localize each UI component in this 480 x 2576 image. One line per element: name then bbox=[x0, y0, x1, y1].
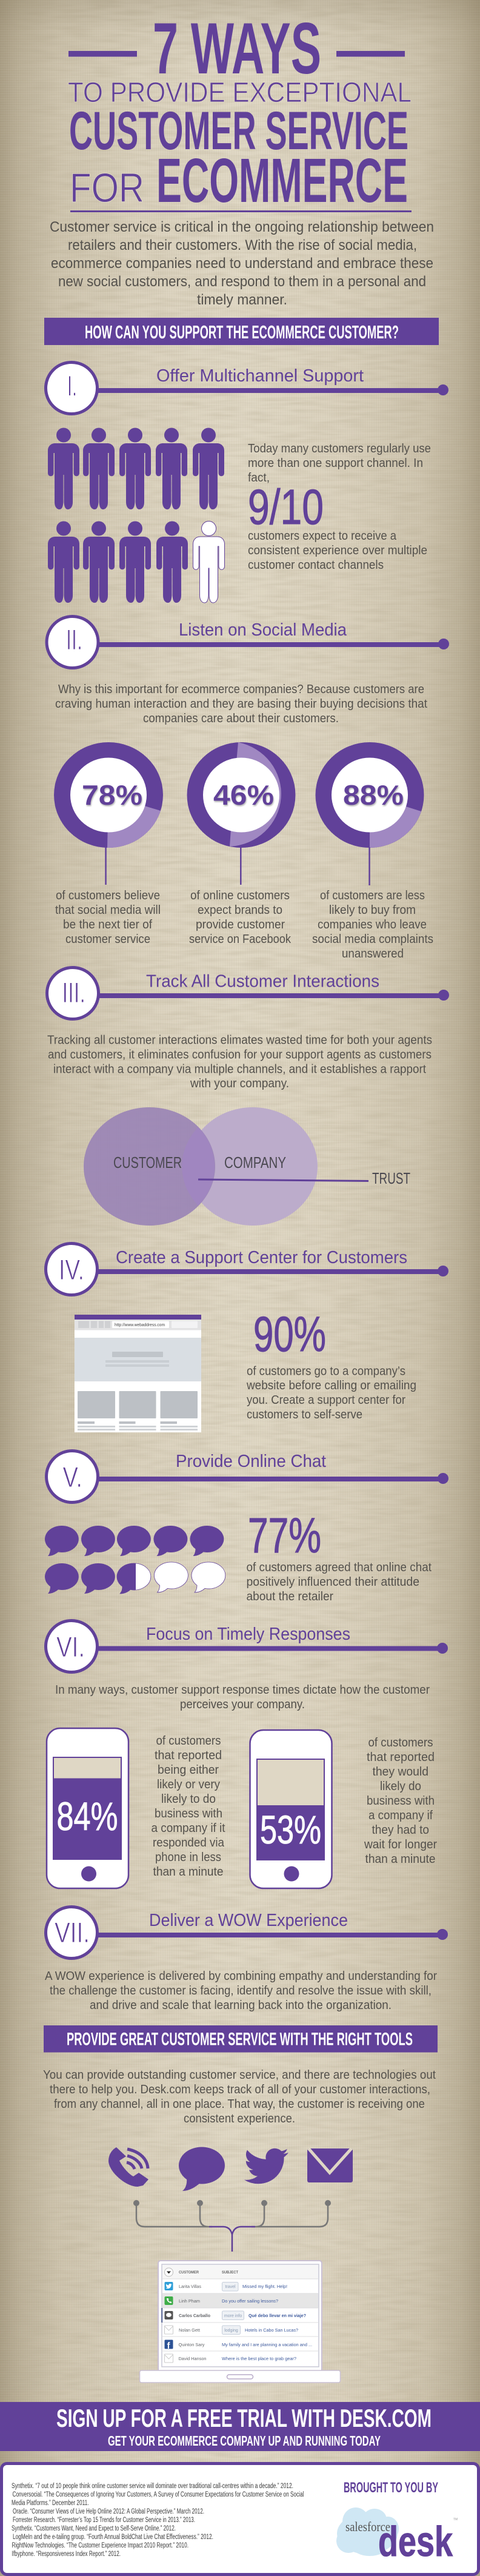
phone gauge: 53% bbox=[250, 1730, 332, 1888]
phone gauge: 84% bbox=[47, 1728, 128, 1888]
icon: envelope bbox=[307, 2148, 353, 2182]
captions under donuts: expect brands to bbox=[198, 904, 282, 917]
captions under donuts: that social media will bbox=[55, 904, 161, 917]
text: 84% caption: responded via bbox=[153, 1836, 225, 1850]
stat: 90% self-serve: you. Create a support center for bbox=[247, 1394, 405, 1407]
text: 53% caption: business with bbox=[367, 1794, 435, 1808]
sources list: LogMeIn and the e-tailing group. “Fourth Annual BoldChat Live Chat Effectiveness.” 2012. bbox=[13, 2534, 213, 2541]
laptop with desk.com case list: travel bbox=[225, 2285, 236, 2289]
banner: right tools bbox=[44, 2025, 438, 2052]
text: multichannel stat: consistent experience over multiple bbox=[248, 544, 427, 557]
stat: 90% self-serve: 90% bbox=[253, 1307, 326, 1362]
title: FOR bbox=[70, 165, 144, 211]
section I header bbox=[46, 363, 448, 414]
section VI header bbox=[46, 1620, 448, 1672]
donut chart: 46% bbox=[187, 742, 296, 885]
logo: salesforce desk: salesforce bbox=[345, 2519, 390, 2534]
text: why social matters: craving human interaction and they are basing their buying decisions that bbox=[55, 697, 427, 711]
banner: how can you support bbox=[44, 318, 439, 345]
donut chart: 88% bbox=[315, 742, 424, 885]
sources list: Synthetix. “Customers Want, Need and Expect to Self-Serve Online.” 2012. bbox=[12, 2525, 176, 2532]
laptop with desk.com case list: SUBJECT bbox=[222, 2271, 238, 2275]
text: 53% caption: that reported bbox=[367, 1751, 435, 1764]
stat: 90% self-serve: customers to self-serve bbox=[247, 1408, 362, 1421]
text: 53% caption: wait for longer bbox=[364, 1838, 437, 1851]
text: 53% caption bbox=[364, 1736, 437, 1866]
text: tracking interactions: with your company. bbox=[190, 1077, 289, 1090]
section III header: Track All Customer Interactions bbox=[146, 971, 379, 991]
text: multichannel stat: customer contact channels bbox=[248, 558, 384, 572]
stat: 90% self-serve bbox=[246, 1307, 416, 1421]
section V header bbox=[46, 1451, 448, 1503]
venn diagram: customer and company trust: TRUST bbox=[372, 1169, 410, 1187]
stat: 77% online chat bbox=[246, 1508, 432, 1603]
icon grid: nine of ten people bbox=[48, 428, 224, 603]
text: 84% caption: a company if it bbox=[152, 1822, 225, 1835]
section IV header: Create a Support Center for Customers bbox=[116, 1248, 407, 1267]
section II header bbox=[47, 616, 449, 668]
section I header: I. bbox=[67, 370, 77, 401]
donut chart: 88%: 88% bbox=[343, 779, 404, 811]
text: 84% caption bbox=[152, 1734, 225, 1879]
intro text bbox=[50, 219, 434, 308]
text: response times bbox=[55, 1683, 430, 1711]
text: why social matters bbox=[55, 683, 427, 725]
captions under donuts bbox=[55, 889, 433, 961]
text: multichannel stat: Today many customers regularly use bbox=[248, 442, 431, 455]
section VI header: VI. bbox=[56, 1631, 85, 1663]
phone gauge: 53%: 53% bbox=[260, 1807, 321, 1852]
laptop with desk.com case list: Where is the best place to grab gear? bbox=[222, 2356, 296, 2361]
laptop with desk.com case list: Missed my flight. Help! bbox=[242, 2284, 287, 2289]
intro text: Customer service is critical in the ongoing relationship between bbox=[50, 219, 434, 235]
icon: phone bbox=[108, 2147, 148, 2187]
text: multichannel stat: customers expect to receive a bbox=[248, 529, 397, 543]
text: 84% caption: likely to do bbox=[161, 1793, 216, 1806]
text: desk.com pitch: You can provide outstanding customer service, and there are technologies out bbox=[43, 2068, 436, 2082]
text: desk.com pitch: from any channel, all in one place. That way, the customer is receiving one bbox=[54, 2098, 425, 2111]
laptop with desk.com case list: f bbox=[167, 2341, 171, 2351]
section VII header bbox=[46, 1907, 448, 1959]
donut chart: 46%: 46% bbox=[213, 779, 274, 811]
text: why social matters: companies care about their customers. bbox=[143, 712, 339, 725]
laptop with desk.com case list: lodging bbox=[224, 2329, 238, 2333]
text: tracking interactions bbox=[47, 1033, 432, 1090]
stat: 90% self-serve: of customers go to a company’s bbox=[247, 1364, 405, 1378]
sources list: Synthetix. “7 out of 10 people think online customer service will dominate over traditional call-centres within a decade.” 2012. bbox=[12, 2483, 293, 2490]
stat: 77% online chat: 77% bbox=[248, 1508, 321, 1563]
laptop with desk.com case list: Nolan Gett bbox=[179, 2327, 201, 2333]
section III header: III. bbox=[62, 976, 85, 1008]
captions under donuts: of customers are less bbox=[320, 889, 425, 902]
section II header: Listen on Social Media bbox=[179, 620, 347, 640]
text: tracking interactions: interact with a company via multiple channels, and it establishes a rapport bbox=[53, 1062, 426, 1076]
text: multichannel stat: 9/10 bbox=[248, 480, 324, 535]
text: 53% caption: than a minute bbox=[365, 1853, 435, 1866]
text: desk.com pitch bbox=[43, 2068, 436, 2125]
section IV header: IV. bbox=[59, 1253, 84, 1286]
captions under donuts: provide customer bbox=[196, 918, 285, 931]
text: why social matters: Why is this important for ecommerce companies? Because customers are bbox=[58, 683, 424, 696]
browser mockup: support center: http://www.webaddress.com bbox=[115, 1323, 165, 1327]
sources list: Conversocial. “The Consequences of Ignoring Your Customers, A Survey of Consumer Expectations for Customer Service on Social bbox=[12, 2491, 304, 2498]
text: wow experience bbox=[45, 1970, 437, 2012]
text: desk.com pitch: consistent experience. bbox=[184, 2112, 295, 2125]
text: 53% caption: they had to bbox=[372, 1823, 429, 1837]
captions under donuts: companies who leave bbox=[318, 918, 427, 931]
text: 84% caption: of customers bbox=[156, 1734, 221, 1748]
logo: salesforce desk: desk bbox=[378, 2518, 453, 2565]
captions under donuts: of customers believe bbox=[56, 889, 160, 902]
text: 84% caption: business with bbox=[155, 1807, 222, 1820]
laptop with desk.com case list: Do you offer sailing lessons? bbox=[222, 2298, 278, 2304]
icon grid: chat bubbles 77% bbox=[45, 1526, 225, 1594]
text: 84% caption: phone in less bbox=[155, 1851, 221, 1864]
title: TO PROVIDE EXCEPTIONAL bbox=[68, 76, 412, 108]
section IV header bbox=[46, 1243, 448, 1295]
text: response times: In many ways, customer support response times dictate how the customer bbox=[55, 1683, 430, 1697]
section III header bbox=[47, 968, 449, 1019]
captions under donuts: unanswered bbox=[342, 947, 404, 961]
text: multichannel stat bbox=[248, 442, 431, 572]
intro text: ecommerce companies need to understand and embrace these bbox=[51, 255, 433, 272]
captions under donuts: likely to buy from bbox=[329, 904, 416, 917]
venn diagram: customer and company trust: CUSTOMER bbox=[113, 1153, 182, 1172]
text: 84% caption: likely or very bbox=[157, 1778, 220, 1791]
intro text: timely manner. bbox=[197, 292, 287, 308]
title: 7 WAYS bbox=[153, 8, 321, 89]
captions under donuts: social media complaints bbox=[312, 933, 433, 946]
laptop with desk.com case list: Quinton Sary bbox=[178, 2342, 205, 2347]
section V header: V. bbox=[63, 1461, 82, 1493]
sources list: RightNow Technologies. “The Customer Experience Impact 2010 Report.” 2010. bbox=[12, 2542, 188, 2549]
captions under donuts: service on Facebook bbox=[189, 933, 292, 946]
stat: 77% online chat: of customers agreed that online chat bbox=[246, 1561, 432, 1574]
text: 84% caption: than a minute bbox=[153, 1865, 223, 1879]
captions under donuts: customer service bbox=[65, 933, 150, 946]
captions under donuts: be the next tier of bbox=[63, 918, 152, 931]
text: multichannel stat: more than one support channel. In bbox=[248, 457, 423, 470]
text: 84% caption: that reported bbox=[155, 1749, 222, 1762]
icon: twitter bird bbox=[244, 2148, 288, 2184]
venn diagram: customer and company trust: COMPANY bbox=[224, 1153, 286, 1172]
laptop with desk.com case list: My family and I are planning a vacation and ... bbox=[222, 2342, 312, 2347]
call to action banner bbox=[0, 2402, 480, 2451]
phone gauge: 84%: 84% bbox=[57, 1794, 118, 1839]
footer panel bbox=[1, 2463, 479, 2575]
laptop with desk.com case list: Larita Villas bbox=[179, 2284, 201, 2289]
text: multichannel stat: fact, bbox=[248, 471, 270, 485]
section I header: Offer Multichannel Support bbox=[156, 366, 364, 386]
text: 84% caption: being either bbox=[158, 1763, 219, 1777]
laptop with desk.com case list: Linh Pham bbox=[179, 2298, 200, 2304]
sources list: Oracle. “Consumer Views of Live Help Online 2012: A Global Perspective.” March 2012. bbox=[13, 2508, 204, 2515]
text: response times: perceives your company. bbox=[180, 1698, 305, 1711]
laptop with desk.com case list: Hotels in Cabo San Lucas? bbox=[245, 2327, 298, 2333]
sources list: Ifbyphone. “Responsiveness Index Report.” 2012. bbox=[12, 2551, 121, 2558]
text: 53% caption: likely do bbox=[380, 1780, 421, 1793]
laptop with desk.com case list: more info bbox=[224, 2314, 242, 2318]
title bbox=[68, 8, 412, 215]
intro text: retailers and their customers. With the rise of social media, bbox=[68, 237, 417, 253]
section VI header: Focus on Timely Responses bbox=[146, 1625, 350, 1644]
browser mockup: support center bbox=[75, 1315, 201, 1432]
text: wow experience: A WOW experience is delivered by combining empathy and understanding for bbox=[45, 1970, 437, 1983]
captions under donuts: of online customers bbox=[190, 889, 290, 902]
laptop with desk.com case list: Qué debo llevar en mi viaje? bbox=[248, 2313, 306, 2318]
laptop with desk.com case list: Carlos Carballo bbox=[179, 2313, 210, 2318]
laptop with desk.com case list: CUSTOMER bbox=[179, 2271, 199, 2275]
text: tracking interactions: and customers, it eliminates confusion for your support agents as customers bbox=[48, 1048, 432, 1061]
text: 53% caption: they would bbox=[372, 1765, 428, 1779]
sources list: Forrester Research. “Forrester’s Top 15 Trends for Customer Service in 2013.” 2013. bbox=[13, 2517, 195, 2524]
donut chart: 78% bbox=[54, 742, 163, 885]
section VII header: VII. bbox=[55, 1916, 90, 1948]
icon: chat bubble bbox=[179, 2147, 225, 2191]
laptop with desk.com case list: David Hanson bbox=[178, 2356, 206, 2361]
logo: salesforce desk: TM bbox=[453, 2518, 458, 2521]
text: desk.com pitch: there to help you. Desk.com keeps track of all of your customer interactions, bbox=[50, 2083, 430, 2096]
text: 53% caption: a company if bbox=[368, 1809, 433, 1822]
intro text: new social customers, and respond to them in a personal and bbox=[58, 273, 426, 290]
stat: 77% online chat: about the retailer bbox=[246, 1590, 333, 1603]
text: 53% caption: of customers bbox=[368, 1736, 433, 1749]
section V header: Provide Online Chat bbox=[176, 1452, 326, 1471]
text: wow experience: and drive and scale that learning back into the organization. bbox=[90, 1999, 392, 2012]
stat: 90% self-serve: website before calling or emailing bbox=[246, 1379, 416, 1392]
text: wow experience: the challenge the customer is facing, identify and resolve the issue with skill, bbox=[50, 1984, 432, 1997]
laptop with desk.com case list bbox=[139, 2261, 341, 2383]
connector: channels merge into desk bbox=[133, 2200, 331, 2252]
text: tracking interactions: Tracking all customer interactions elimates wasted time for both your agents bbox=[47, 1033, 432, 1047]
section VII header: Deliver a WOW Experience bbox=[149, 1911, 348, 1930]
logo: salesforce desk bbox=[336, 2507, 458, 2565]
stat: 77% online chat: positively influenced their attitude bbox=[246, 1575, 419, 1589]
venn diagram: customer and company trust bbox=[84, 1107, 410, 1226]
section II header: II. bbox=[66, 623, 82, 656]
sources list: Media Platforms.” December 2011. bbox=[12, 2500, 88, 2507]
sources list bbox=[12, 2483, 304, 2558]
donut chart: 78%: 78% bbox=[82, 779, 142, 811]
